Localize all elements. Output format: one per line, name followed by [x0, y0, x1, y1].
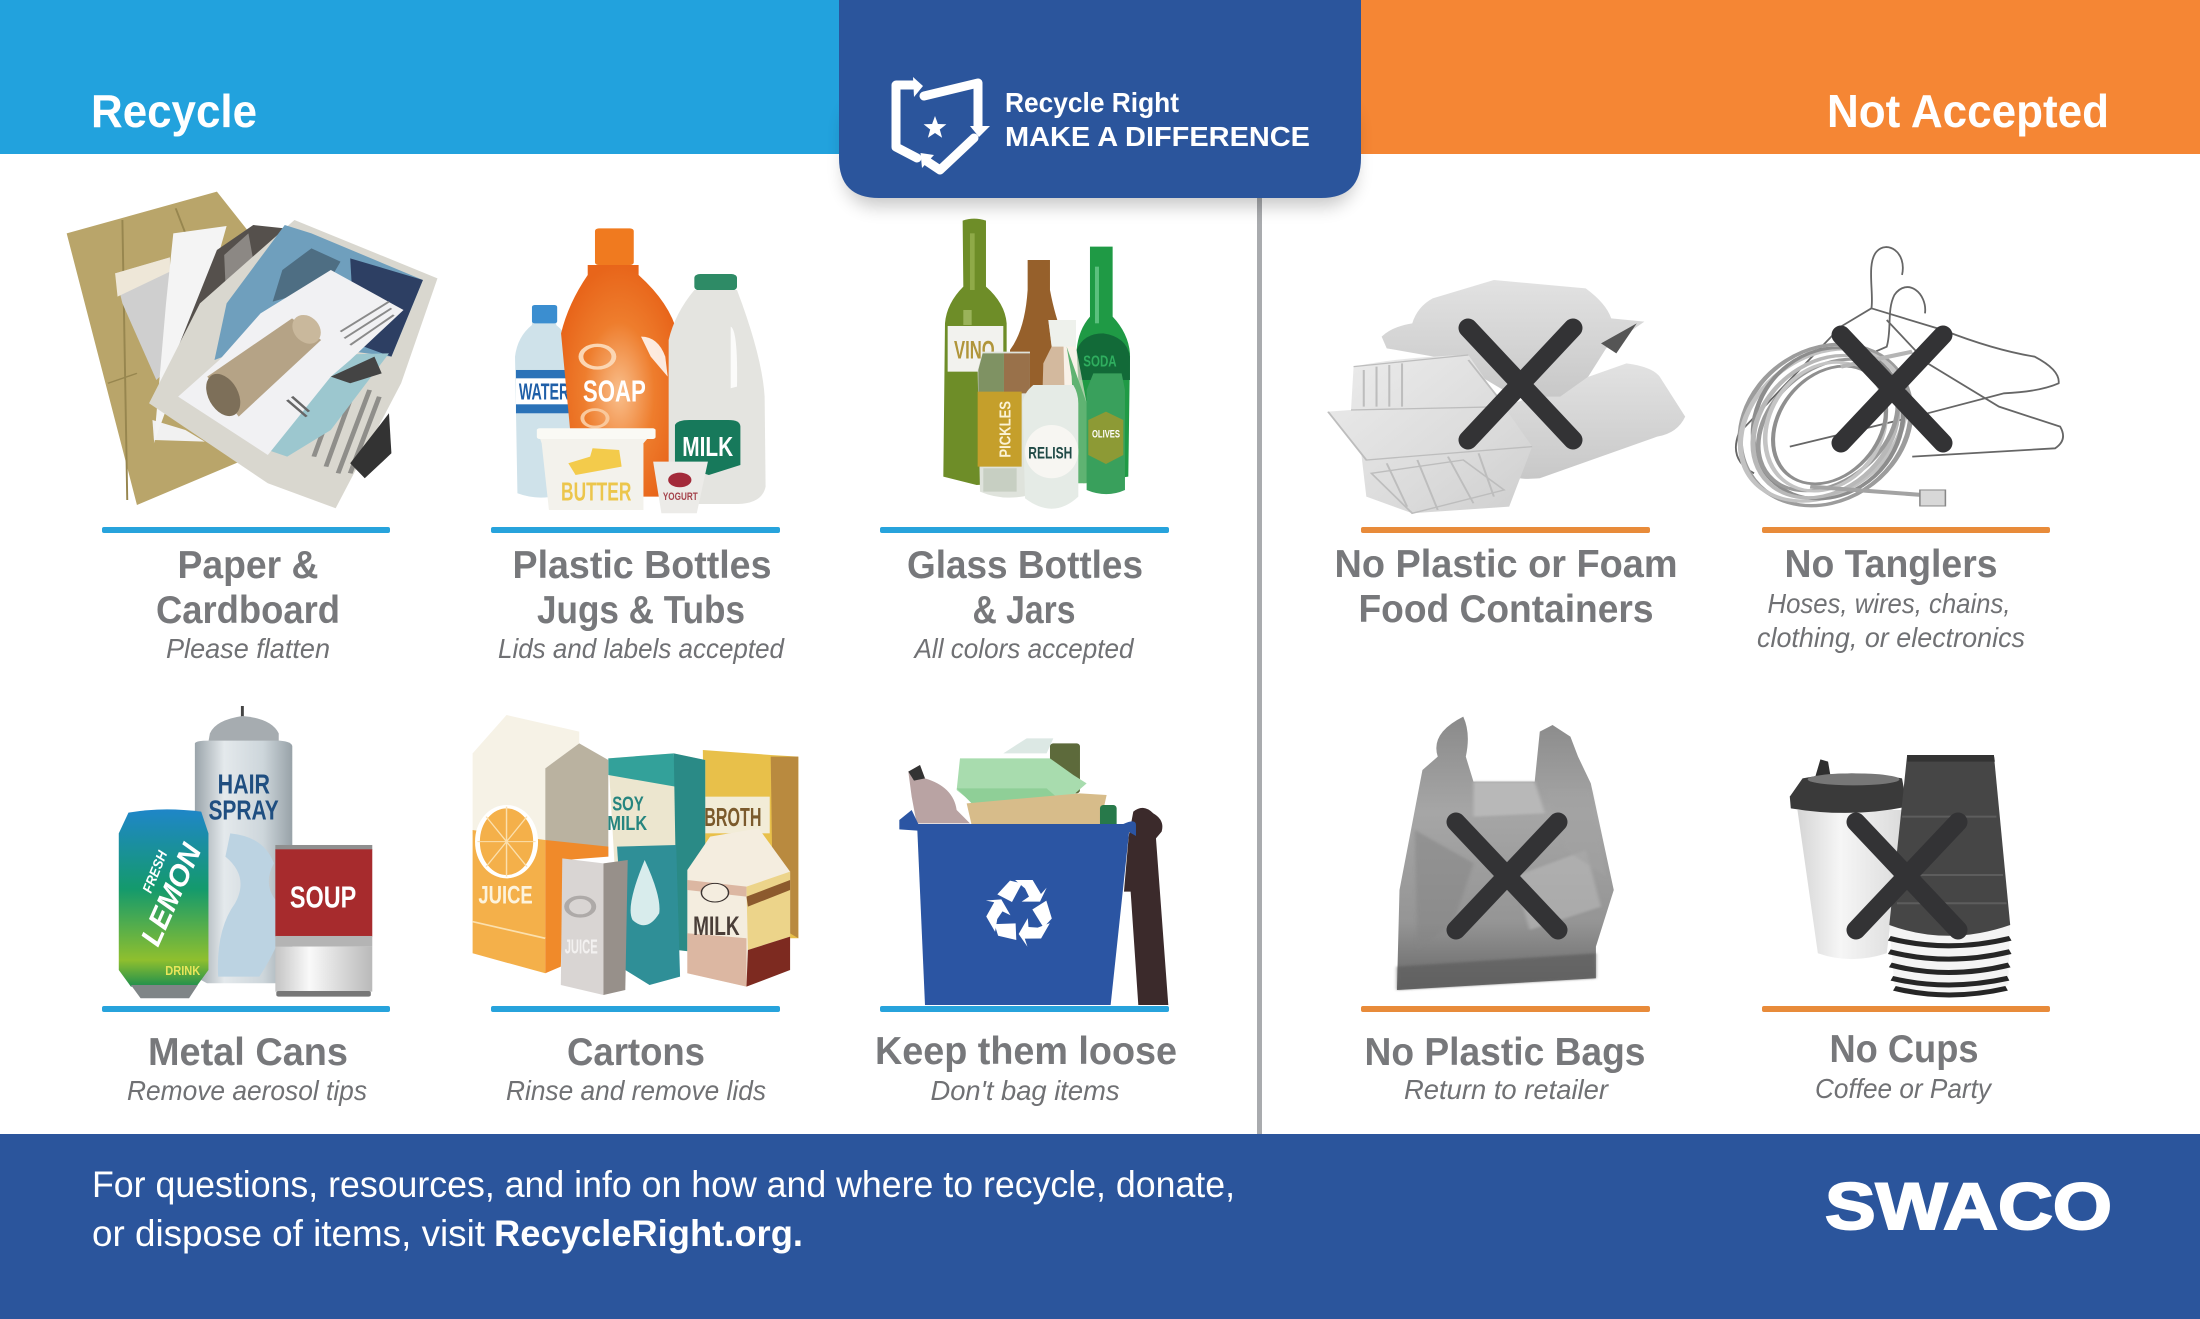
header band: not accepted [1361, 0, 2200, 154]
illustration: glass bottles and jars: RELISH [1028, 444, 1072, 463]
title: Cartons [567, 1031, 705, 1074]
title: No Cups [1830, 1028, 1978, 1071]
illustration: metal cans: SOUP [290, 880, 356, 915]
item: metal cans [102, 706, 390, 1106]
title: Glass Bottles [907, 544, 1143, 587]
title [907, 544, 1143, 632]
illustration: cartons: SOY [612, 793, 644, 815]
title: Paper & [178, 544, 318, 587]
item: no food containers [1328, 280, 1685, 631]
illustration: plastic containers: SOAP [583, 374, 646, 409]
title: & Jars [972, 589, 1076, 632]
illustration: plastic containers: WATER [519, 378, 569, 404]
item: paper and cardboard [67, 192, 437, 664]
title: Plastic Bottles [512, 544, 772, 587]
title: No Plastic Bags [1364, 1031, 1646, 1074]
can label: lemon: LEMON [135, 838, 209, 951]
illustration: glass bottles and jars: OLIVES [1092, 428, 1120, 440]
item: plastic bottles [491, 228, 785, 664]
item: no tanglers [1712, 247, 2063, 653]
title: Food Containers [1358, 588, 1654, 631]
icon: x mark [1841, 335, 1943, 443]
heading: recycle: Recycle [91, 85, 257, 137]
can label: fresh: FRESH [139, 848, 171, 895]
title [1334, 543, 1678, 631]
footer text: RecycleRight.org. [494, 1213, 803, 1254]
illustration: metal cans: SPRAY [208, 794, 279, 826]
title: No Tanglers [1784, 543, 1998, 586]
logo text [1005, 87, 1310, 152]
logo text: Recycle Right [1005, 87, 1179, 118]
header band: recycle [0, 0, 839, 154]
item: glass bottles [880, 219, 1169, 664]
note: Please flatten [166, 633, 330, 664]
illustration: cartons: MILK [693, 912, 740, 941]
illustration: glass bottles and jars: VINO [954, 336, 995, 364]
note [1757, 588, 2025, 653]
footer text [92, 1164, 1235, 1254]
illustration: metal cans: DRINK [165, 965, 201, 978]
item: no plastic bags [1361, 717, 1650, 1105]
icon: x mark [1856, 822, 1958, 930]
illustration: glass bottles and jars [943, 219, 1130, 509]
note: Coffee or Party [1815, 1073, 1993, 1104]
icon: recycling symbol [979, 880, 1059, 951]
item: keep them loose [875, 738, 1177, 1106]
note: Rinse and remove lids [506, 1075, 766, 1106]
title [512, 544, 772, 632]
illustration: plastic containers: BUTTER [561, 477, 631, 506]
illustration: cartons: MILK [607, 812, 647, 835]
note: Remove aerosol tips [127, 1075, 367, 1106]
note: Don't bag items [930, 1075, 1120, 1106]
note: clothing, or electronics [1757, 622, 2025, 653]
illustration: food containers [1328, 280, 1685, 513]
illustration: plastic bag [1397, 717, 1614, 990]
title: Keep them loose [875, 1030, 1177, 1073]
title [156, 544, 340, 632]
icon: x mark [1468, 328, 1573, 440]
title: Jugs & Tubs [537, 589, 745, 632]
illustration: cups [1790, 755, 2010, 995]
footer text: or dispose of items, visit [92, 1213, 486, 1254]
logo text: MAKE A DIFFERENCE [1005, 121, 1310, 152]
note: Hoses, wires, chains, [1768, 588, 2010, 619]
illustration: cartons [473, 715, 798, 995]
icon: ohio recycling arrows [896, 77, 990, 170]
illustration: recycling bin [899, 738, 1168, 1005]
illustration: cable and hangers [1712, 247, 2063, 516]
note: Return to retailer [1404, 1074, 1610, 1105]
illustration: metal cans: HAIR [218, 768, 270, 800]
title: Cardboard [156, 589, 340, 632]
icon: x mark [1456, 822, 1558, 930]
illustration: cartons: BROTH [704, 803, 761, 832]
illustration: glass bottles and jars: SODA [1083, 354, 1117, 371]
illustration: plastic containers [515, 228, 766, 513]
item: cartons [473, 715, 798, 1106]
title: No Plastic or Foam [1334, 543, 1678, 586]
illustration: metal cans [119, 706, 372, 998]
illustration: plastic containers: MILK [682, 432, 733, 462]
footer [0, 1134, 2200, 1319]
note: Lids and labels accepted [498, 633, 785, 664]
illustration: glass bottles and jars: PICKLES [998, 401, 1015, 458]
heading: not accepted: Not Accepted [1827, 85, 2109, 137]
item: no cups [1762, 755, 2050, 1104]
illustration: cartons: JUICE [478, 880, 533, 909]
title: Metal Cans [148, 1031, 348, 1074]
footer text: For questions, resources, and info on how and where to recycle, donate, [92, 1164, 1235, 1205]
illustration: cartons: JUICE [565, 936, 598, 958]
logo: swaco: SWACO [1825, 1169, 2112, 1243]
logo panel: recycle right [839, 0, 1361, 198]
note: All colors accepted [913, 633, 1135, 664]
illustration: paper and cardboard [67, 192, 437, 508]
illustration: plastic containers: YOGURT [663, 490, 698, 502]
